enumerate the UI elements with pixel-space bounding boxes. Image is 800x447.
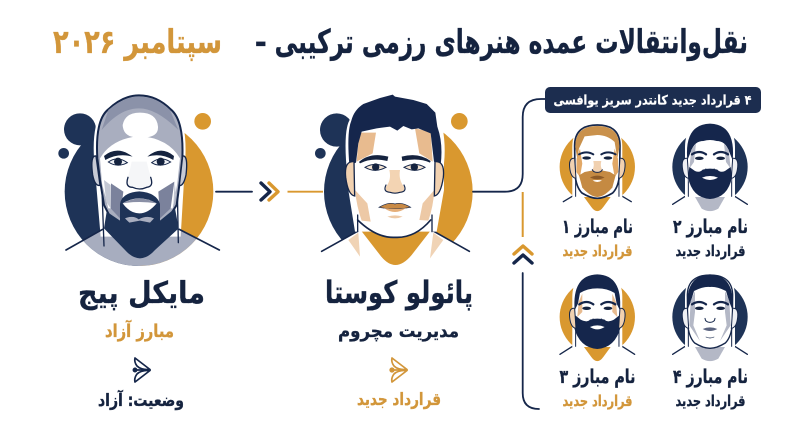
label: fighter 4: [673, 366, 748, 410]
portrait: fighter 3: [554, 272, 641, 364]
label: fighter 2: قرارداد جدید: [676, 242, 746, 260]
text: Paulo Costa: مدیریت مچروم: [338, 321, 459, 342]
text: Paulo status: قرارداد جدید: [357, 390, 441, 410]
title: سپتامبر ۲۰۲۶: [53, 22, 222, 62]
label: fighter 4: نام مبارز ۴: [673, 366, 748, 388]
text: Paulo Costa: [325, 275, 473, 342]
label: fighter 1: قرارداد جدید: [562, 242, 632, 260]
portrait: Paulo Costa: [315, 94, 473, 265]
text: Michael Page: مبارز آزاد: [105, 319, 174, 342]
label: fighter 4: قرارداد جدید: [676, 392, 746, 410]
text: Paulo Costa: پائولو کوستا: [325, 275, 473, 311]
connector: line with double chevrons: [216, 183, 323, 200]
portrait: fighter 2: [667, 122, 753, 214]
text: Michael status: وضعیت: آزاد: [98, 389, 184, 411]
badge: contracts heading: [545, 87, 761, 113]
bracket connector: [473, 99, 546, 409]
text: Michael Page: [78, 276, 205, 342]
label: fighter 1: نام مبارز ۱: [562, 216, 633, 238]
label: fighter 3: [560, 366, 636, 410]
portrait: fighter 4: [667, 272, 753, 364]
label: fighter 3: قرارداد جدید: [562, 392, 632, 410]
label: fighter 1: [562, 216, 633, 260]
text: Michael Page: مایکل پیج: [78, 276, 205, 311]
label: fighter 2: [673, 216, 748, 260]
portrait: fighter 1: [554, 122, 641, 214]
icon: navy arrow: [133, 358, 150, 382]
icon: orange arrow: [390, 358, 407, 382]
portrait: Michael Page: [58, 93, 223, 270]
badge: contracts heading: ۴ قرارداد جدید کانتدر سریز یوافسی: [554, 94, 752, 108]
title: [53, 22, 748, 62]
label: fighter 2: نام مبارز ۲: [673, 216, 748, 238]
label: fighter 3: نام مبارز ۳: [560, 366, 636, 388]
